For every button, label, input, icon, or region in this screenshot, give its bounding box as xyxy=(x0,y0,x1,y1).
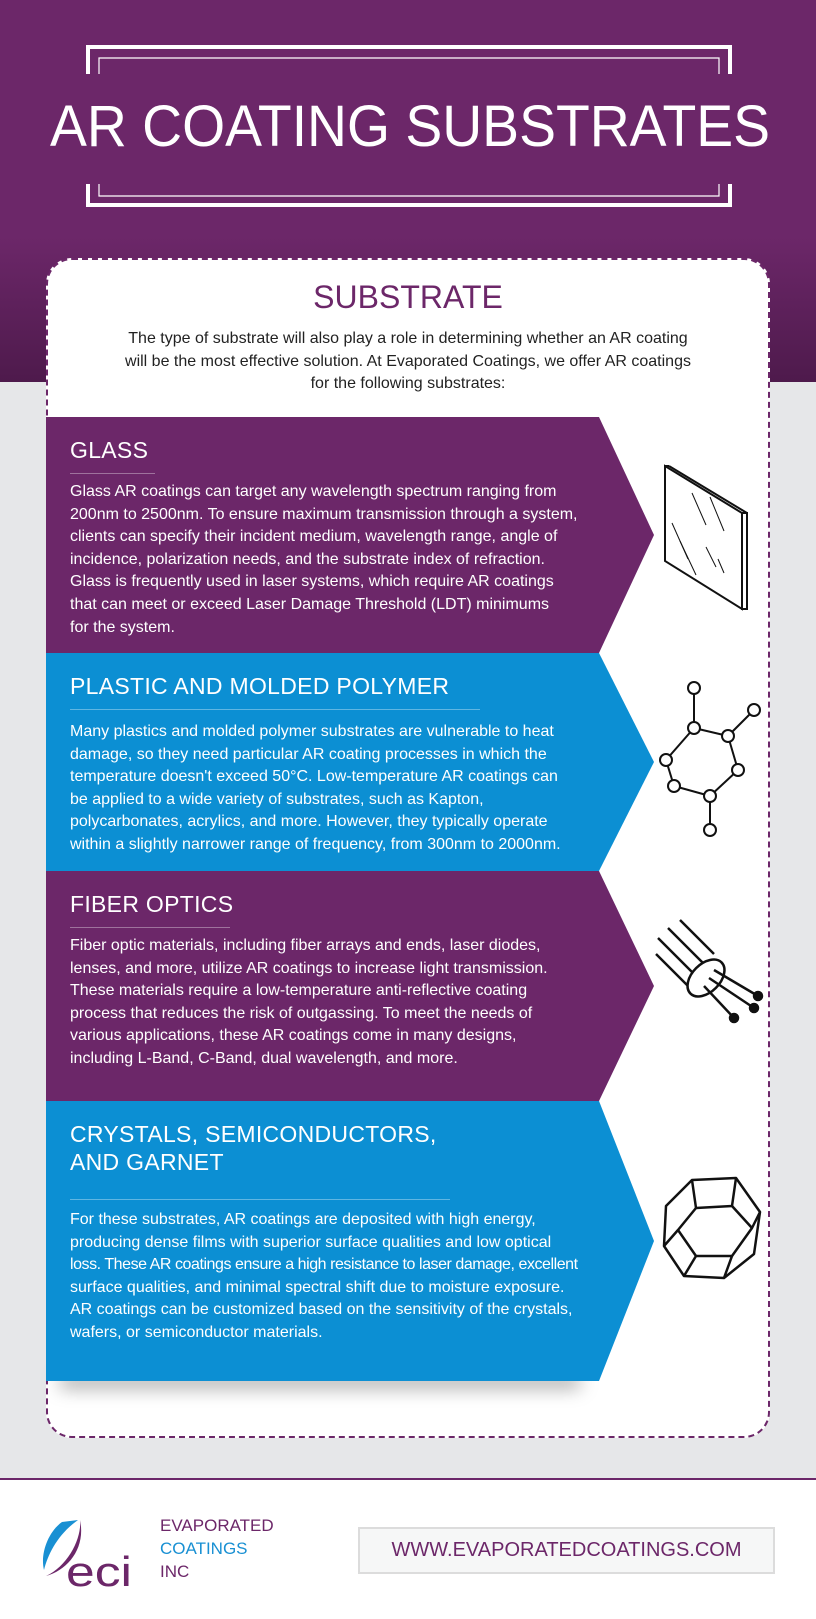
text: plastic: temperature doesn't exceed 50°C. Low-temperature AR coatings can xyxy=(70,768,558,785)
heading: glass: GLASS xyxy=(70,437,148,463)
logo xyxy=(42,1516,274,1594)
text: plastic: polycarbonates, acrylics, and more. However, they typically operate xyxy=(70,813,548,830)
text: crystals xyxy=(70,1211,578,1341)
text: plastic: Many plastics and molded polymer substrates are vulnerable to heat xyxy=(70,723,554,740)
logo: eci xyxy=(66,1548,132,1594)
text: glass: incidence, polarization needs, and the substrate index of refraction. xyxy=(70,551,545,568)
heading: crystals xyxy=(70,1121,437,1175)
text: fiber: These materials require a low-temperature anti-reflective coating xyxy=(70,982,527,999)
logo text xyxy=(160,1516,274,1581)
text: glass: Glass is frequently used in laser systems, which require AR coatings xyxy=(70,573,554,590)
url box xyxy=(358,1527,775,1574)
text: glass xyxy=(70,483,578,636)
text: crystals: For these substrates, AR coatings are deposited with high energy, xyxy=(70,1211,536,1228)
text: crystals: wafers, or semiconductor materials. xyxy=(70,1324,323,1341)
text: fiber: Fiber optic materials, including fiber arrays and ends, laser diodes, xyxy=(70,937,540,954)
text: fiber: lenses, and more, utilize AR coatings to increase light transmission. xyxy=(70,960,548,977)
panel: fiber optics xyxy=(46,871,654,1101)
text: fiber: process that reduces the risk of outgassing. To meet the needs of xyxy=(70,1005,532,1022)
text: glass: clients can specify their incident medium, wavelength range, angle of xyxy=(70,528,557,545)
heading: crystals: CRYSTALS, SEMICONDUCTORS, xyxy=(70,1121,437,1147)
panel: crystals xyxy=(46,1101,654,1381)
card xyxy=(46,258,770,1438)
text: plastic xyxy=(70,723,561,853)
logo text: INC xyxy=(160,1562,189,1581)
text: glass: Glass AR coatings can target any wavelength spectrum ranging from xyxy=(70,483,556,500)
footer line xyxy=(0,1478,816,1480)
gray background xyxy=(0,382,816,1479)
heading: substrate: SUBSTRATE xyxy=(313,279,503,315)
intro text: for the following substrates: xyxy=(311,375,505,392)
text: plastic: be applied to a wide variety of substrates, such as Kapton, xyxy=(70,791,484,808)
text: crystals: surface qualities, and minimal spectral shift due to moisture exposure. xyxy=(70,1279,564,1296)
icon: fiber cable xyxy=(655,919,764,1024)
text: crystals: AR coatings can be customized based on the sensitivity of the crystals, xyxy=(70,1301,572,1318)
text: crystals: producing dense films with superior surface qualities and low optical xyxy=(70,1234,551,1251)
panel shadow xyxy=(60,1366,580,1380)
icon: crystal xyxy=(662,1176,762,1280)
heading: fiber: FIBER OPTICS xyxy=(70,891,233,917)
icon: molecule xyxy=(659,681,761,837)
intro text xyxy=(125,330,691,392)
heading: plastic: PLASTIC AND MOLDED POLYMER xyxy=(70,673,449,699)
heading: crystals: AND GARNET xyxy=(70,1149,224,1175)
logo text: COATINGS xyxy=(160,1539,248,1558)
text: crystals: loss. These AR coatings ensure a high resistance to laser damage, excellent xyxy=(70,1256,578,1273)
text: glass: 200nm to 2500nm. To ensure maximum transmission through a system, xyxy=(70,506,578,523)
intro text: The type of substrate will also play a role in determining whether an AR coating xyxy=(128,330,688,347)
title block xyxy=(50,45,770,207)
logo text: EVAPORATED xyxy=(160,1516,274,1535)
text: fiber: including L-Band, C-Band, dual wavelength, and more. xyxy=(70,1050,458,1067)
panel: plastic xyxy=(46,653,654,871)
header background xyxy=(0,0,816,382)
panel: glass xyxy=(46,417,654,653)
text: glass: for the system. xyxy=(70,619,175,636)
text: fiber xyxy=(70,937,548,1067)
text: glass: that can meet or exceed Laser Damage Threshold (LDT) minimums xyxy=(70,596,549,613)
text: fiber: various applications, these AR coatings come in many designs, xyxy=(70,1027,516,1044)
intro text: will be the most effective solution. At Evaporated Coatings, we offer AR coatings xyxy=(125,352,691,370)
icon: glass pane xyxy=(664,464,748,611)
text: plastic: damage, so they need particular AR coating processes in which the xyxy=(70,746,547,763)
url box: WWW.EVAPORATEDCOATINGS.COM xyxy=(392,1539,742,1561)
text: plastic: within a slightly narrower range of frequency, from 300nm to 2000nm. xyxy=(70,836,561,853)
